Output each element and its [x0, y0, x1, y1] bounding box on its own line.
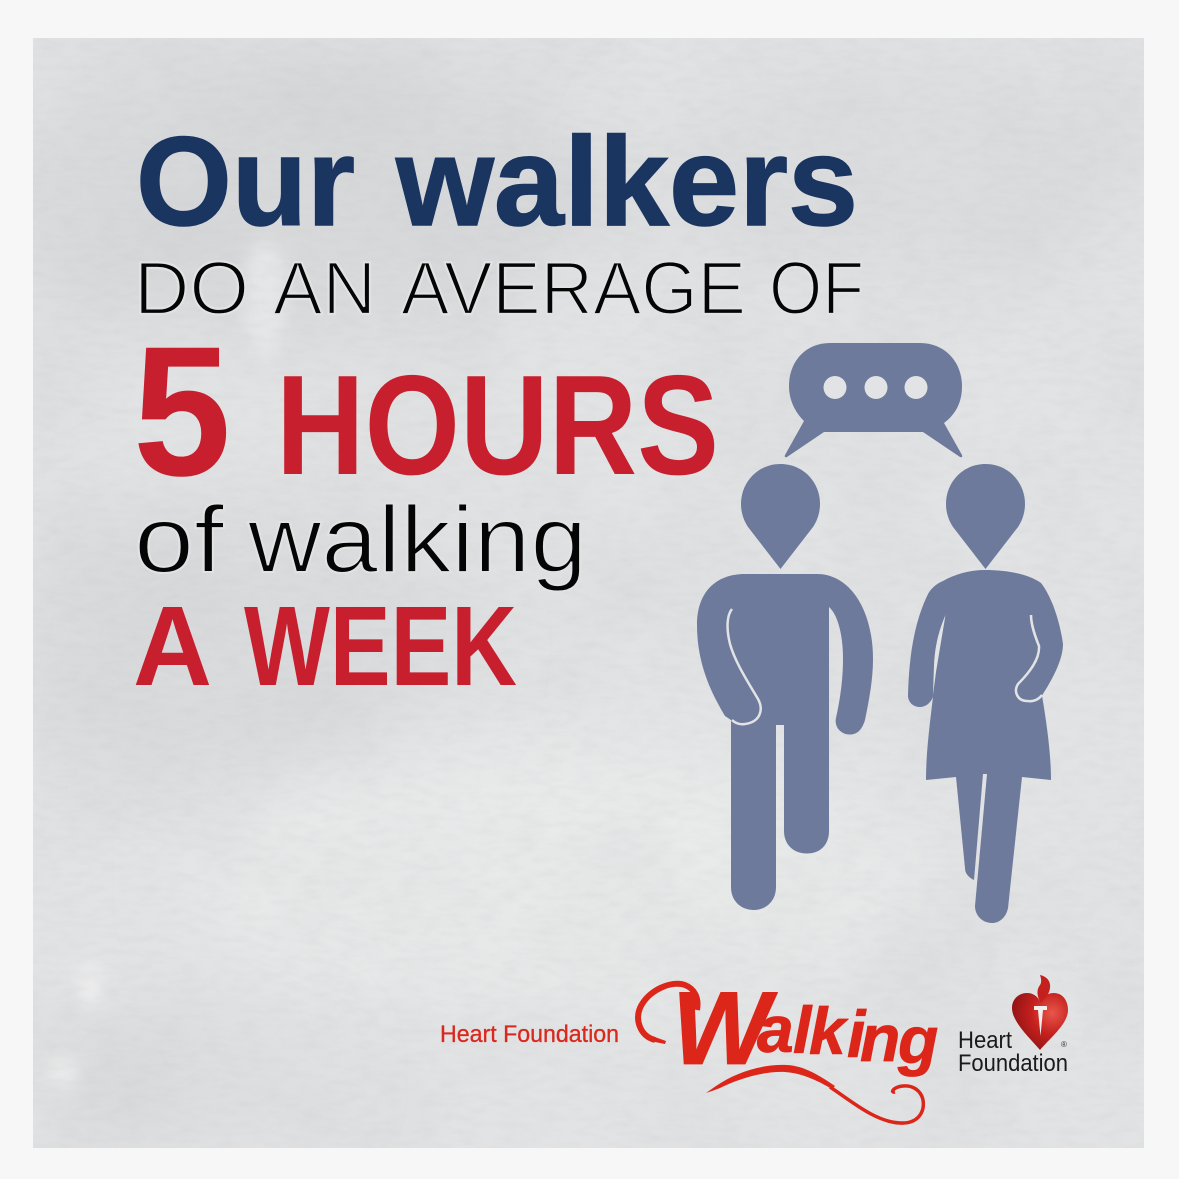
- torch: [1034, 1006, 1047, 1036]
- man head: [741, 464, 820, 569]
- woman body: [908, 570, 1063, 923]
- figure: 5 hours: HOURS: [276, 346, 719, 505]
- heading: Our walkers: Our: [136, 111, 355, 252]
- figure: 5 hours: 5: [133, 309, 231, 515]
- text: of walking: [134, 487, 587, 593]
- logo shoelace swash tail: [830, 1086, 923, 1123]
- icon: speech bubble: [785, 343, 962, 457]
- woman arm outline: [1016, 615, 1042, 701]
- icon: man walking: [697, 464, 873, 910]
- text: do an average of: AVERAGE: [401, 246, 746, 330]
- text: Heart Foundation label: Heart Foundation: [440, 1021, 619, 1048]
- logo: Heart Foundation: [958, 975, 1068, 1077]
- text: do an average of: [134, 246, 864, 330]
- logo: Heart Foundation: Foundation: [958, 1050, 1068, 1077]
- text: a week: WEEK: [244, 583, 517, 709]
- registered mark: ®: [1061, 1040, 1067, 1049]
- logo wordmark: Walking: [672, 971, 938, 1087]
- man arm outline: [728, 609, 761, 724]
- text: a week: [133, 583, 517, 709]
- text: of walking: walking: [247, 487, 587, 593]
- icon: woman walking: [908, 464, 1063, 923]
- logo shoelace swash head: [706, 1065, 835, 1093]
- logo shoelace loop: [638, 984, 698, 1040]
- heart icon: [1012, 993, 1068, 1050]
- man body: [697, 574, 873, 910]
- text: do an average of: OF: [769, 246, 864, 330]
- text: a week: A: [133, 583, 212, 709]
- text: do an average of: AN: [273, 246, 376, 330]
- logo: Walking script: [638, 971, 938, 1123]
- logo text: Heart: [958, 1027, 1012, 1054]
- text: of walking: of: [134, 487, 225, 593]
- logo shoelace tip: [650, 1036, 666, 1044]
- flame: [1037, 975, 1050, 1003]
- woman head: [946, 464, 1025, 569]
- figure: 5 hours: [133, 309, 719, 515]
- heading: Our walkers: walkers: [395, 111, 858, 252]
- text: do an average of: DO: [134, 246, 249, 330]
- woman arm gap: [933, 615, 946, 695]
- heading: Our walkers: [136, 111, 858, 252]
